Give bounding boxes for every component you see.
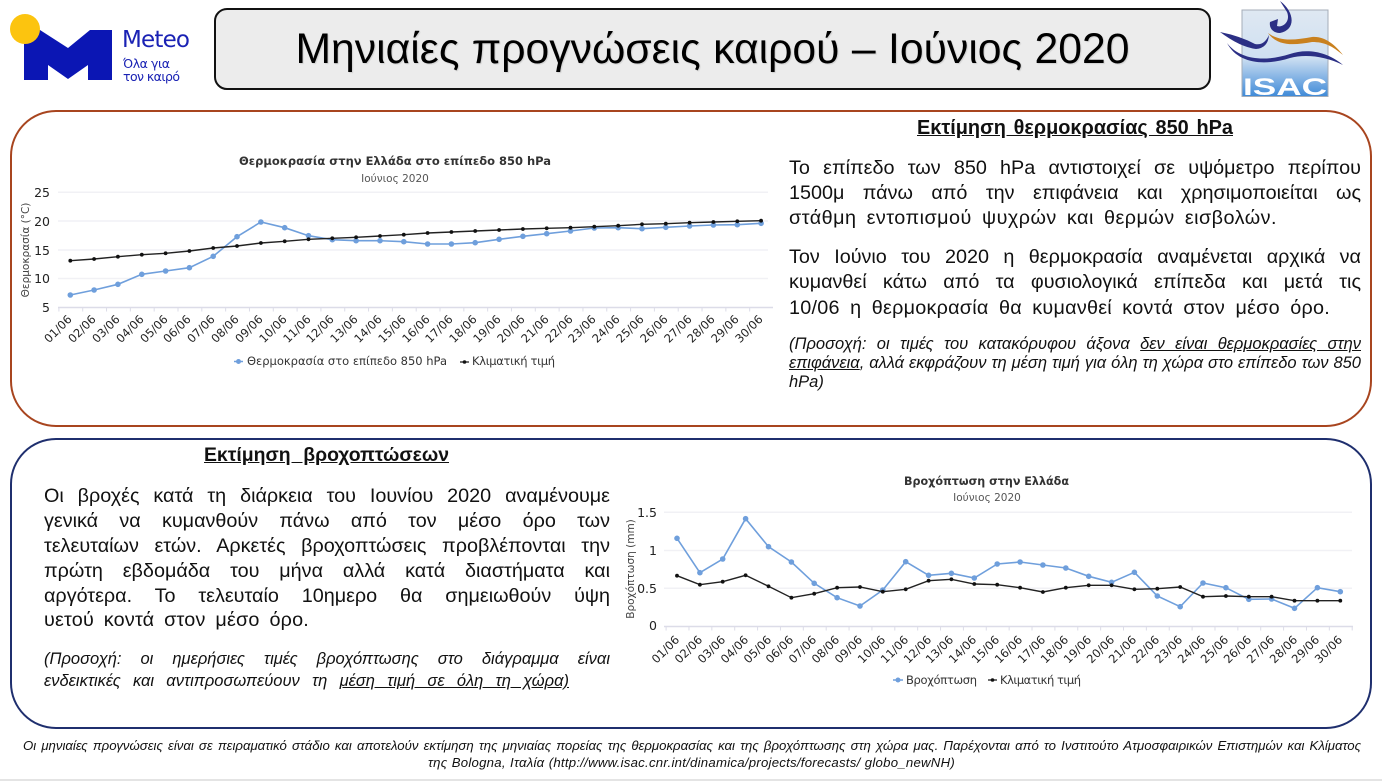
x axis labels [649, 633, 1345, 666]
text block: June temperature outlook: 10/06 η θερμοκρασία θα κυμανθεί κοντά στον μέσο όρο. [789, 297, 1330, 319]
legend [234, 354, 555, 368]
x axis labels [41, 312, 766, 346]
y axis labels: 1 [649, 543, 657, 558]
x axis labels: 18/06 [446, 312, 480, 346]
x axis labels: 10/06 [855, 633, 888, 666]
line chart: rainfall [625, 474, 1353, 687]
x axis labels: 17/06 [422, 312, 456, 346]
x axis labels: 05/06 [741, 633, 774, 666]
x axis labels: 11/06 [878, 633, 911, 666]
y axis labels: 15 [34, 243, 50, 258]
series: climatology [677, 575, 1340, 601]
x axis labels: 23/06 [1152, 633, 1185, 666]
y axis labels: 25 [34, 185, 50, 200]
y axis title: Θερμοκρασία (°C) [20, 203, 32, 297]
x axis labels: 13/06 [923, 633, 956, 666]
y axis labels: 5 [42, 300, 50, 315]
y axis labels: 20 [34, 214, 50, 229]
x axis labels: 23/06 [565, 312, 599, 346]
x axis labels: 08/06 [809, 633, 842, 666]
x axis labels: 03/06 [695, 633, 728, 666]
x axis labels: 14/06 [351, 312, 385, 346]
series: rainfall [677, 519, 1340, 608]
x axis labels: 06/06 [160, 312, 194, 346]
x axis labels: 24/06 [589, 312, 623, 346]
text block: June temperature outlook: Τον Ιούνιο του 2020 η θερμοκρασία αναμένεται αρχικά να [789, 246, 1361, 268]
icon: blue M [24, 30, 112, 80]
logo swooshes [1220, 1, 1343, 65]
text block: rainfall outlook: υετού κοντά στον μέσο όρο. [44, 609, 309, 631]
heading: temperature estimate: Εκτίμηση θερμοκρασίας 850 hPa [917, 117, 1233, 139]
note: daily values caution: (Προσοχή: οι ημερήσιες τιμές βροχόπτωσης στο διάγραμμα είναι [44, 650, 610, 668]
x axis labels: 06/06 [763, 633, 796, 666]
x axis labels: 07/06 [184, 312, 218, 346]
x axis labels: 05/06 [137, 312, 171, 346]
x axis labels: 02/06 [65, 312, 99, 346]
x axis labels: 03/06 [89, 312, 123, 346]
panel: rainfall [10, 438, 1372, 729]
x axis labels: 13/06 [327, 312, 361, 346]
y axis labels: 1.5 [637, 505, 657, 520]
x axis labels: 14/06 [946, 633, 979, 666]
chart subtitle: Ιούνιος 2020 [361, 173, 429, 185]
heading: rainfall estimate: Εκτίμηση βροχοπτώσεων [204, 444, 449, 466]
x axis labels: 19/06 [470, 312, 504, 346]
logo wordmark: τον καιρό [123, 69, 180, 84]
y axis labels [637, 505, 657, 633]
x axis labels: 27/06 [1244, 633, 1277, 666]
x axis labels: 25/06 [1198, 633, 1231, 666]
legend: Κλιματική τιμή [472, 354, 555, 368]
x axis labels: 04/06 [113, 312, 147, 346]
logo square [1242, 10, 1328, 96]
y axis title: Βροχόπτωση (mm) [625, 519, 637, 619]
x axis labels: 07/06 [786, 633, 819, 666]
logo wordmark: Όλα για [122, 56, 170, 71]
x axis labels: 01/06 [649, 633, 682, 666]
x axis labels: 22/06 [542, 312, 576, 346]
note: daily values caution [44, 650, 610, 690]
legend: Θερμοκρασία στο επίπεδο 850 hPa [247, 354, 447, 368]
x axis labels: 24/06 [1175, 633, 1208, 666]
x axis labels: 09/06 [232, 312, 266, 346]
x axis labels: 30/06 [1312, 633, 1345, 666]
x axis labels: 11/06 [280, 312, 314, 346]
x axis labels: 16/06 [992, 633, 1025, 666]
x axis labels: 26/06 [1221, 633, 1254, 666]
text block: rainfall outlook: τελευταίων ετών. Αρκετές βροχοπτώσεις προβλέπονται την [44, 535, 610, 557]
x axis labels: 09/06 [832, 633, 865, 666]
footer note: Οι μηνιαίες προγνώσεις είναι σε πειραματικό στάδιο και αποτελούν εκτίμηση της μηνιαίας πορείας της θερμοκρασίας και της βροχόπτωσης στη χώρα μας. Παρέχονται από το Ινστιτούτο Ατμοσφαιρικών Επιστημών και Κλίματος [23, 738, 1361, 752]
x axis labels: 29/06 [708, 312, 742, 346]
x axis labels: 28/06 [684, 312, 718, 346]
note: axis caution [789, 335, 1361, 390]
x axis labels: 20/06 [494, 312, 528, 346]
y axis labels: 10 [34, 271, 50, 286]
legend [893, 673, 1081, 687]
x axis labels: 22/06 [1129, 633, 1162, 666]
legend: Κλιματική τιμή [1000, 673, 1081, 687]
y axis labels: 0 [649, 618, 657, 633]
note: daily values caution: ενδεικτικές και αντιπροσωπεύουν τη μέση τιμή σε όλη τη χώρα) [44, 672, 569, 690]
x axis labels: 20/06 [1084, 633, 1117, 666]
x axis labels: 16/06 [399, 312, 433, 346]
line chart: temperature at 850 hPa [20, 154, 773, 368]
series: climatology [70, 221, 761, 261]
note: axis caution: επιφάνεια, αλλά εκφράζουν τη μέση τιμή για όλη τη χώρα στο επίπεδο των 850 [789, 354, 1361, 372]
chart title: Θερμοκρασία στην Ελλάδα στο επίπεδο 850 hPa [239, 154, 551, 168]
note: axis caution: (Προσοχή: οι τιμές του κατακόρυφου άξονα δεν είναι θερμοκρασίες στην [789, 335, 1361, 353]
x axis labels: 26/06 [637, 312, 671, 346]
title text: Μηνιαίες προγνώσεις καιρού – Ιούνιος 2020 [296, 25, 1130, 73]
series: temperature [70, 222, 761, 295]
logo text: ISAC [1243, 74, 1327, 101]
x axis labels: 18/06 [1038, 633, 1071, 666]
y axis labels: 0.5 [637, 581, 657, 596]
panel: temperature [10, 110, 1372, 427]
footer note: της Bologna, Ιταλία (http://www.isac.cnr.int/dinamica/projects/forecasts/ globo_newNH) [428, 754, 955, 770]
x axis labels: 01/06 [41, 312, 75, 346]
text block: rainfall outlook [44, 485, 610, 631]
x axis labels: 30/06 [732, 312, 766, 346]
text block: June temperature outlook: κυμανθεί κάτω από τα φυσιολογικά επίπεδα και μετά τις [789, 271, 1361, 293]
x axis labels: 04/06 [718, 633, 751, 666]
x axis labels: 25/06 [613, 312, 647, 346]
x axis labels: 15/06 [969, 633, 1002, 666]
text block: June temperature outlook [789, 246, 1361, 319]
y axis labels [34, 185, 50, 315]
logo: Meteo [10, 14, 190, 84]
title [214, 8, 1211, 90]
x axis labels: 08/06 [208, 312, 242, 346]
footer note [23, 738, 1361, 770]
x axis labels: 10/06 [256, 312, 290, 346]
x axis labels: 21/06 [1106, 633, 1139, 666]
text block: 850 hPa explanation: Το επίπεδο των 850 hPa αντιστοιχεί σε υψόμετρο περίπου [789, 157, 1361, 179]
x axis labels: 27/06 [661, 312, 695, 346]
text block: 850 hPa explanation: στάθμη εντοπισμού ψυχρών και θερμών εισβολών. [789, 207, 1277, 229]
x axis labels: 17/06 [1015, 633, 1048, 666]
icon: yellow sun [10, 14, 40, 44]
chart title: Βροχόπτωση στην Ελλάδα [904, 474, 1069, 488]
text block: rainfall outlook: γενικά να κυμανθούν πάνω από τον μέσο όρο των [44, 510, 610, 532]
legend: Βροχόπτωση [906, 673, 977, 687]
x axis labels: 19/06 [1061, 633, 1094, 666]
x axis labels: 12/06 [901, 633, 934, 666]
text block: 850 hPa explanation [789, 157, 1361, 229]
x axis labels: 15/06 [375, 312, 409, 346]
x axis labels: 29/06 [1289, 633, 1322, 666]
x axis labels: 21/06 [518, 312, 552, 346]
x axis labels: 28/06 [1267, 633, 1300, 666]
chart subtitle: Ιούνιος 2020 [953, 492, 1021, 504]
x axis labels: 02/06 [672, 633, 705, 666]
text block: 850 hPa explanation: 1500μ πάνω από την επιφάνεια και χρησιμοποιείται ως [789, 182, 1361, 204]
logo wordmark: Meteo [122, 27, 190, 53]
note: axis caution: hPa) [789, 372, 824, 390]
text block: rainfall outlook: Οι βροχές κατά τη διάρκεια του Ιουνίου 2020 αναμένουμε [44, 485, 610, 507]
x axis labels: 12/06 [303, 312, 337, 346]
logo: ISAC [1220, 1, 1343, 101]
logo wordmark [122, 27, 190, 84]
text block: rainfall outlook: αργότερα. Το τελευταίο 10ημερο θα σημειωθούν ύψη [44, 585, 610, 607]
text block: rainfall outlook: πρώτη εβδομάδα του μήνα αλλά κατά διαστήματα και [44, 560, 610, 582]
